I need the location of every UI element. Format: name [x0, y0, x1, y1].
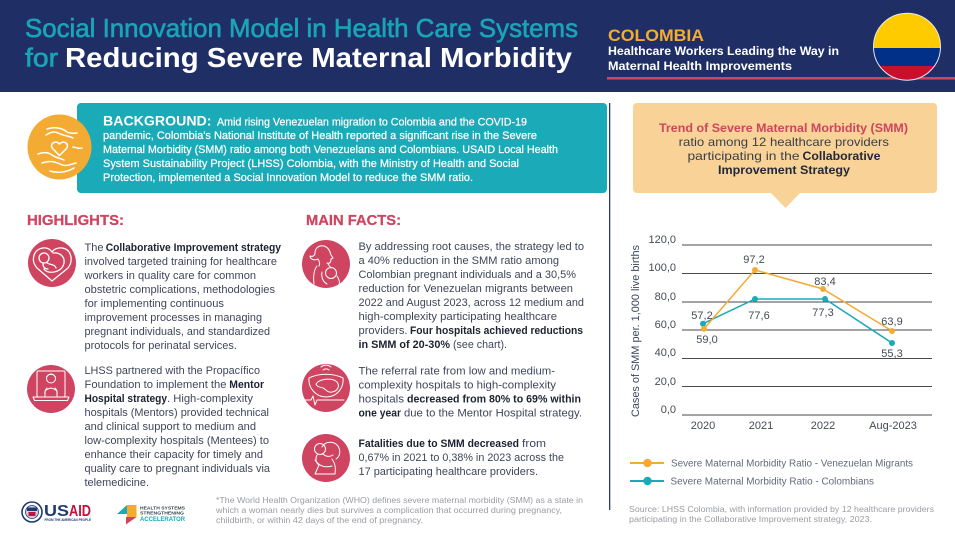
callout text: Trend of Severe Maternal Morbidity (SMM)	[659, 121, 908, 135]
text: strategy results: 2022 and August 2023, across 12 medium and	[358, 297, 584, 309]
text: fatalities	[358, 438, 564, 478]
text: mentor hospital strategy: telemedicine.	[84, 477, 149, 489]
y axis labels: 20,0	[655, 376, 676, 388]
icon: heart with fetus	[28, 239, 76, 287]
x axis labels: 2020	[691, 420, 715, 432]
text: mentor hospital strategy: Hospital strategy	[84, 393, 167, 405]
text: strategy results: Four hospitals achieved reductions	[410, 325, 583, 337]
data labels: 63,9	[881, 316, 903, 328]
background text	[103, 114, 558, 184]
icon: doctor on laptop	[27, 365, 75, 413]
icon: mother with baby	[302, 240, 350, 288]
text: mentor hospital strategy: Foundation to implement the	[84, 379, 227, 391]
y axis labels: 60,0	[655, 319, 676, 331]
source note	[629, 504, 934, 524]
icon: hands holding heart	[28, 114, 92, 180]
y axis labels: 40,0	[655, 347, 676, 359]
text: mentor hospital strategy: . High-complexity	[167, 393, 254, 405]
text: strategy results: reduction for Venezuelan migrants between	[358, 283, 573, 295]
text: collaborative improvement strategy: The	[84, 242, 104, 254]
logo: USAID: US	[44, 503, 69, 520]
logo: USAID	[22, 502, 92, 522]
text: referral rate: complexity hospitals to high-complexity	[358, 380, 557, 392]
callout text: participating in the	[688, 149, 800, 163]
country heading: COLOMBIA	[608, 26, 704, 45]
text: referral rate: hospitals	[358, 394, 404, 406]
data labels: 57,2	[691, 310, 713, 322]
callout text: ratio among 12 healthcare providers	[679, 135, 889, 149]
text: strategy results: a 40% reduction in the SMM ratio among	[358, 255, 559, 267]
text: mentor hospital strategy: LHSS partnered with the Propacífico	[84, 365, 260, 377]
legend: Severe Maternal Morbidity Ratio - Venezuelan Migrants	[671, 458, 913, 470]
text: mentor hospital strategy	[84, 365, 270, 489]
country heading: Maternal Health Improvements	[608, 61, 792, 73]
data labels: 77,3	[812, 307, 834, 319]
text: collaborative improvement strategy: involved targeted training for healthcare	[84, 256, 277, 268]
source note: participating in the Collaborative Improvement strategy, 2023.	[629, 514, 872, 524]
logo: Health Systems Strengthening Accelerator	[117, 505, 186, 524]
x axis labels: 2021	[749, 420, 773, 432]
x axis labels	[691, 420, 917, 432]
text: referral rate: decreased from 80% to 69% within	[407, 394, 581, 406]
text: fatalities: from	[522, 438, 546, 450]
text: strategy results: providers.	[358, 325, 408, 337]
text: collaborative improvement strategy: for implementing continuous	[84, 298, 224, 310]
text: strategy results: high-complexity participating healthcare	[358, 311, 557, 323]
legend	[630, 458, 913, 488]
text: mentor hospital strategy: hospitals (Mentors) provided technical	[84, 407, 269, 419]
y axis title: Cases of SMM per. 1,000 live births	[630, 244, 642, 417]
y axis labels: 120,0	[648, 234, 676, 246]
text: fatalities: 17 participating healthcare providers.	[358, 466, 538, 478]
logo: Health Systems Strengthening Accelerator: ACCELERATOR	[140, 517, 186, 523]
text: referral rate: one year	[358, 408, 401, 420]
background text: System Sustainability Project (LHSS) Colombia, with the Ministry of Health and Social	[103, 158, 519, 170]
x axis labels: Aug-2023	[869, 420, 917, 432]
callout text: Improvement Strategy	[718, 163, 850, 177]
title: Social Innovation Model in Health Care Systems	[25, 13, 578, 43]
background text: BACKGROUND:	[103, 114, 212, 128]
logo: Health Systems Strengthening Accelerator: STRENGTHENING	[140, 510, 184, 516]
x axis labels: 2022	[811, 420, 835, 432]
text: collaborative improvement strategy: protocols for perinatal services.	[84, 340, 237, 352]
text: collaborative improvement strategy: pregnant individuals, and standardized	[84, 326, 270, 338]
text: referral rate: The referral rate from low and medium-	[358, 366, 555, 378]
series: Colombians	[700, 296, 895, 346]
country heading: Healthcare Workers Leading the Way in	[608, 46, 839, 58]
series: Venezuelan migrants	[701, 267, 895, 334]
footnote: which a woman nearly dies but survives a complication that occurred during pregnancy,	[215, 505, 562, 515]
icon: Colombia flag	[873, 12, 941, 81]
icon: mother embracing child	[302, 434, 350, 482]
heading: highlights: HIGHLIGHTS:	[27, 213, 124, 229]
text: strategy results: Colombian pregnant individuals and a 30,5%	[358, 269, 577, 281]
icon: ultrasound	[302, 364, 350, 412]
footnote: childbirth, or within 42 days of the end of pregnancy.	[216, 515, 423, 525]
panel: chart title callout	[633, 103, 937, 208]
header band	[0, 0, 955, 92]
background text: Protection, implemented a Social Innovation Model to reduce the SMM ratio.	[103, 172, 473, 184]
footnote: *The World Health Organization (WHO) defines severe maternal morbidity (SMM) as a state in	[216, 495, 583, 505]
text: strategy results	[358, 241, 584, 351]
logo: USAID: FROM THE AMERICAN PEOPLE	[44, 518, 92, 522]
text: collaborative improvement strategy: workers in quality care for common	[83, 270, 256, 282]
logo: USAID: AID	[69, 503, 91, 520]
logo: Health Systems Strengthening Accelerator: HEALTH SYSTEMS	[140, 506, 186, 512]
title	[25, 13, 578, 73]
y axis labels: 100,0	[648, 262, 676, 274]
text: mentor hospital strategy: and clinical support to medium and	[84, 421, 256, 433]
footnote	[215, 495, 583, 525]
text: mentor hospital strategy: Mentor	[229, 379, 264, 391]
text: referral rate	[358, 366, 582, 420]
text: collaborative improvement strategy: improvement processes in managing	[84, 312, 262, 324]
callout text	[659, 121, 908, 177]
data labels: 59,0	[696, 334, 718, 346]
text: strategy results: By addressing root causes, the strategy led to	[358, 241, 584, 253]
data labels: 55,3	[881, 348, 903, 360]
text: mentor hospital strategy: enhance their capacity for timely and	[84, 449, 263, 461]
y axis labels: 80,0	[655, 291, 676, 303]
data labels: 97,2	[743, 254, 765, 266]
source note: Source: LHSS Colombia, with information provided by 12 healthcare providers	[629, 504, 934, 514]
text: fatalities: Fatalities due to SMM decreased	[358, 438, 519, 450]
background text: pandemic, Colombia's National Institute of Health reported a significant rise in the Severe	[103, 130, 537, 142]
text: referral rate: due to the Mentor Hospital strategy.	[404, 408, 582, 420]
data labels: 83,4	[814, 276, 836, 288]
text: strategy results: in SMM of 20-30%	[358, 339, 451, 351]
text: collaborative improvement strategy: obstetric complications, methodologies	[84, 284, 275, 296]
text: fatalities: 0,67% in 2021 to 0,38% in 2023 across the	[358, 452, 564, 464]
country heading	[607, 26, 955, 80]
data labels	[691, 254, 903, 360]
background text: Amid rising Venezuelan migration to Colombia and the COVID-19	[217, 116, 527, 128]
text: mentor hospital strategy: low-complexity hospitals (Mentees) to	[84, 435, 269, 447]
panel: background	[77, 103, 607, 193]
y axis labels: 0,0	[661, 404, 676, 416]
text: mentor hospital strategy: quality care to pregnant individuals via	[84, 463, 270, 475]
y axis labels	[648, 234, 676, 416]
text: strategy results: (see chart).	[453, 339, 507, 351]
title: for	[25, 42, 58, 72]
data labels: 77,6	[748, 310, 770, 322]
legend: Severe Maternal Morbidity Ratio - Colombians	[670, 476, 874, 488]
text: collaborative improvement strategy: Collaborative Improvement strategy	[106, 242, 281, 254]
text: collaborative improvement strategy	[83, 242, 281, 352]
callout text: Collaborative	[802, 149, 881, 163]
background text: Maternal Morbidity (SMM) ratio among both Venezuelans and Colombians. USAID Local Health	[103, 144, 558, 156]
line chart	[630, 234, 932, 432]
title: Reducing Severe Maternal Morbidity	[65, 42, 572, 73]
heading: main facts: MAIN FACTS:	[306, 213, 401, 229]
